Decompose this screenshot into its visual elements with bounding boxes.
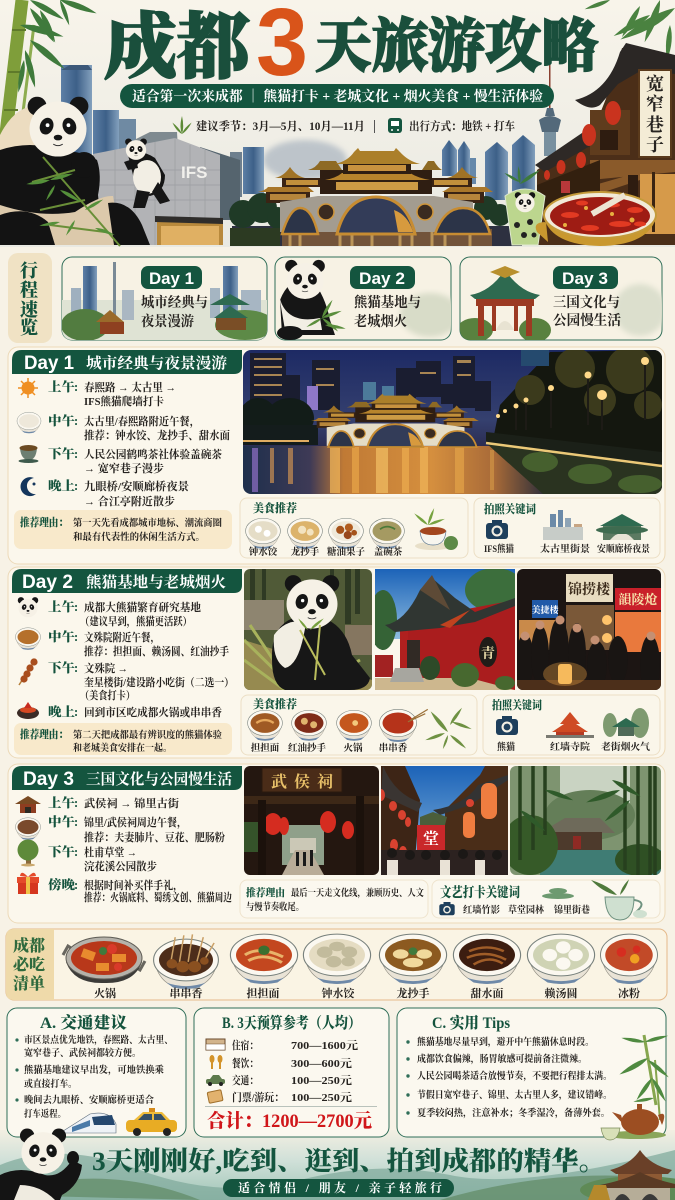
- dish: 担担面: [230, 934, 298, 984]
- Day 3 schedule: 上午: [48, 795, 76, 810]
- icon: taxi: [126, 1108, 177, 1136]
- must-eat tag: 清单: [13, 974, 45, 993]
- Day 2 photo: panda with bamboo: [244, 569, 372, 690]
- Day 2 photo keywords box: 老街烟火气: [601, 741, 650, 753]
- Day 2 reason box: [14, 723, 232, 755]
- dish labels: 担担面: [246, 986, 280, 1000]
- dish: 赖汤圆: [527, 934, 595, 984]
- Day 1 schedule: 推荐：钟水饺、龙抄手、甜水面: [84, 428, 230, 442]
- Day 1 schedule: 下午: [48, 446, 76, 461]
- icon: hotpot: [17, 702, 39, 719]
- overview card day 3: Day 3: [562, 269, 608, 288]
- dish labels: 赖汤圆: [544, 986, 578, 1000]
- panel A: transport advice: 晚间去九眼桥、安顺廊桥更适合: [24, 1094, 154, 1106]
- IFS sign: IFS: [181, 163, 207, 182]
- icon: temple: [15, 796, 41, 813]
- panel C: practical tips: [397, 1008, 666, 1137]
- food: 担担面: [248, 710, 282, 741]
- Day 2 photo: night food street: 韻陵炝: [618, 592, 658, 607]
- Day 2 reason box: 和老城美食安排在一起。: [73, 742, 172, 754]
- Day 1 schedule: :: [74, 479, 78, 493]
- icon: camera: [486, 520, 508, 539]
- icon: bed: [206, 1039, 225, 1050]
- Day 1 food box: 盖碗茶: [374, 546, 403, 558]
- Day 2 photo: night food street: [516, 569, 661, 695]
- icon: rice bowl: [17, 412, 41, 433]
- panel B: budget: 100—250元: [291, 1074, 352, 1087]
- Day 3 header: [12, 766, 242, 790]
- dish labels: 冰粉: [618, 986, 640, 1000]
- Day 1 schedule: IFS熊猫爬墙打卡: [84, 394, 164, 408]
- Day 3 schedule: 杜甫草堂 →: [84, 845, 137, 859]
- panel B: budget: B. 3天预算参考（人均）: [222, 1013, 361, 1032]
- 宽窄巷子 sign: 窄: [646, 94, 664, 114]
- icon: skewer: [19, 658, 38, 685]
- temple bottom right: [580, 1150, 675, 1200]
- overview tag: 程: [20, 280, 38, 300]
- Day 1 schedule: → 合江亭附近散步: [84, 494, 175, 508]
- dish: 甜水面: [453, 934, 521, 984]
- old street sketch: [603, 708, 649, 738]
- panel B: budget: 餐饮：: [232, 1056, 258, 1070]
- panel: Day 2: [8, 567, 665, 758]
- overview card day 2: 熊猫基地与: [354, 294, 421, 311]
- Day 3 reason box: 与慢节奏收尾。: [246, 901, 304, 913]
- Day 1 schedule: :: [74, 380, 78, 394]
- Day 1 schedule: 中午: [48, 413, 76, 428]
- Day 2 photo: night food street: 锦捞楼: [568, 581, 611, 598]
- Day 3 schedule: :: [74, 878, 78, 892]
- panel: Day 1: [8, 346, 665, 564]
- bamboo top right: [584, 0, 675, 61]
- Day 1 food box: 糖油果子: [327, 546, 365, 558]
- Day 1 schedule: 晚上: [48, 478, 76, 493]
- overview card day 3: 公园慢生活: [553, 312, 621, 329]
- skyline: [250, 353, 491, 411]
- Day 3 schedule: 中午: [48, 814, 76, 829]
- season and transport info: 出行方式：地铁 + 打车: [409, 119, 515, 133]
- overview card day 2: 老城烟火: [354, 313, 407, 330]
- panel A: transport advice: 熊猫基地建议早出发，可地铁换乘: [24, 1064, 164, 1076]
- Day 3 art keywords box: 草堂园林: [508, 904, 544, 916]
- water: [243, 446, 662, 494]
- Day 3 art keywords box: [432, 878, 660, 920]
- Day 2 schedule: 晚上: [48, 704, 76, 719]
- panel A: transport advice: A. 交通建议: [40, 1013, 127, 1032]
- icon: ticket: [207, 1090, 223, 1103]
- Day 2 schedule: 推荐：担担面、赖汤圆、红油抄手: [84, 644, 229, 658]
- overview tag: 览: [20, 317, 38, 338]
- Day 1 header: Day 1: [24, 353, 74, 374]
- Anshun bridge with trees and water: [229, 148, 522, 246]
- food: 糖油果子: [329, 518, 363, 549]
- Day 2 photo keywords box: 红墙寺院: [550, 741, 591, 753]
- Day 2 schedule: 下午: [48, 660, 76, 675]
- Day 2 photo: red wall temple: 青: [481, 645, 495, 662]
- hotpot bowl: [536, 192, 656, 246]
- Day 2 photo: night food street: 美捷楼: [531, 604, 559, 615]
- Day 2 schedule: 文殊院 →: [84, 661, 128, 675]
- old street building and sign: [535, 43, 675, 245]
- dish: 火锅: [63, 937, 145, 983]
- panel A: transport advice: 宽窄巷子、武侯祠都较方便。: [24, 1047, 141, 1059]
- Day 1 food box: 龙抄手: [291, 546, 320, 558]
- Day 1 reason box: [14, 510, 232, 549]
- bank: [486, 443, 662, 494]
- IFS building with climbing panda: [93, 132, 240, 245]
- Day 3 schedule: 锦里/武侯祠周边午餐，: [84, 815, 187, 829]
- panel B: budget: 门票/游玩：: [232, 1090, 284, 1104]
- 宽窄巷子 sign: 子: [646, 135, 664, 155]
- Day 2 schedule: 中午: [48, 629, 76, 644]
- Day 1 schedule: 太古里/春熙路附近午餐，: [84, 414, 200, 428]
- Day 1 header: 城市经典与夜景漫游: [86, 354, 227, 372]
- Day 2 food box: 红油抄手: [288, 742, 326, 754]
- Day 3 header: Day 3: [23, 769, 74, 790]
- Day 1 photo keywords box: 拍照关键词: [484, 502, 536, 516]
- overview card day 1: Day 1: [149, 269, 194, 288]
- footer slogan: 3天刚刚好,吃到、逛到、拍到成都的精华。: [92, 1146, 606, 1176]
- dish labels: 串串香: [170, 986, 202, 1000]
- Day 3 schedule: :: [74, 845, 78, 859]
- left trees: [243, 398, 314, 425]
- Day 3 schedule: 推荐：火锅底料、蜀绣文创、熊猫周边: [84, 890, 232, 904]
- Day 2 reason box: 推荐理由：: [20, 727, 68, 741]
- Day 1 schedule: 九眼桥/安顺廊桥夜景: [84, 479, 190, 493]
- subtitle pill: 适合第一次来成都 ｜ 熊猫打卡 + 老城文化 + 烟火美食 + 慢生活体验: [132, 88, 543, 105]
- footer audience pill: [223, 1179, 454, 1197]
- panel C: practical tips: C. 实用 Tips: [432, 1013, 510, 1032]
- Day 2 schedule: [15, 597, 234, 719]
- Day 1 photo keywords box: [474, 498, 660, 558]
- food: 龙抄手: [288, 518, 322, 549]
- icon: camera: [439, 902, 455, 915]
- Day 3 photo: Jinli street: 堂: [423, 829, 439, 848]
- Day 3 art keywords box: 红墙竹影: [463, 904, 500, 916]
- dish labels: 火锅: [94, 986, 116, 1000]
- Day 1 night photo: Anshun bridge: [238, 346, 662, 494]
- giant panda eating bamboo: [0, 97, 150, 246]
- panel B: budget: 300—600元: [291, 1057, 352, 1070]
- Day 1 header: [12, 350, 242, 374]
- Day 1 food box: 美食推荐: [253, 501, 297, 515]
- Day 2 food box: 串串香: [379, 742, 408, 754]
- bamboo left: [4, 0, 98, 150]
- footer audience pill: 适合情侣 / 朋友 / 亲子轻旅行: [238, 1180, 442, 1195]
- Day 3 schedule: :: [74, 815, 78, 829]
- header banner: city illustration and title: [0, 0, 675, 247]
- dish: 钟水饺: [303, 934, 371, 984]
- budget total: 合计：1200—2700元: [207, 1109, 372, 1132]
- panel C: practical tips: 成都饮食偏辣，肠胃敏感可提前备注微辣。: [417, 1053, 587, 1065]
- panel: footer landscape: [0, 1130, 675, 1200]
- panel B: budget: 700—1600元: [291, 1039, 358, 1052]
- overview tag: 速: [20, 299, 40, 320]
- overview card day 1: [61, 257, 275, 341]
- Day 2 header: 熊猫基地与老城烟火: [86, 573, 226, 591]
- must-eat tag: 成都: [13, 936, 45, 955]
- Day 3 reason box: 推荐理由: [246, 886, 285, 899]
- title: [104, 0, 598, 96]
- Day 3 schedule: 武侯祠 → 锦里古街: [84, 796, 179, 810]
- icon: teacup with leaves: [413, 508, 458, 550]
- icon: panda: [18, 597, 38, 617]
- Day 1 reason box: 推荐理由：: [20, 515, 68, 529]
- Day 3 photo: Wuhou shrine gate: [244, 766, 379, 875]
- Day 3 reason box: 最后一天走文化线，兼顾历史、人文: [291, 887, 424, 899]
- panel B: budget: [194, 1008, 389, 1137]
- title: 天旅游攻略: [315, 0, 598, 83]
- Day 1 schedule: 春熙路 → 太古里 →: [84, 380, 176, 394]
- panel: must-eat list: [6, 929, 667, 1000]
- season and transport info: [171, 116, 515, 135]
- icon: moon: [21, 477, 36, 496]
- pine sketch: [542, 888, 574, 899]
- must-eat tag: [6, 929, 54, 1000]
- overview tag: 行: [20, 261, 38, 281]
- icon: sun: [18, 378, 38, 398]
- Day 2 schedule: :: [74, 600, 78, 614]
- Day 2 schedule: （建议早到，熊猫更活跃）: [80, 614, 192, 628]
- climbing panda: [124, 138, 170, 208]
- Day 2 food box: 火锅: [343, 742, 363, 754]
- waving panda: [0, 1129, 82, 1200]
- subtitle pill: [120, 84, 554, 108]
- Day 2 header: Day 2: [22, 572, 73, 593]
- right trees with lamps: [494, 350, 662, 452]
- Day 3 schedule: 傍晚: [48, 877, 76, 892]
- overview card day 3: [457, 257, 666, 342]
- overview tag: [8, 253, 52, 343]
- overview card day 1: 夜景漫游: [141, 313, 194, 330]
- icon: tree: [18, 840, 38, 866]
- Day 2 reason box: 第二天把成都最有辨识度的熊猫体验: [73, 729, 222, 741]
- Day 1 schedule: 人民公园鹤鸣茶社体验盖碗茶: [84, 447, 222, 461]
- dish: 串串香: [154, 934, 218, 989]
- Day 2 food box: 美食推荐: [253, 697, 297, 711]
- overview card day 2: Day 2: [359, 269, 405, 288]
- Day 2 schedule: 回到市区吃成都火锅或串串香: [84, 705, 222, 719]
- Day 2 schedule: 成都大熊猫繁育研究基地: [84, 600, 201, 614]
- Day 3 photo: bamboo garden: [502, 766, 665, 876]
- Day 1 food box: 钟水饺: [249, 546, 278, 558]
- icon: noodle bowl: [15, 628, 41, 650]
- 宽窄巷子 sign: [639, 70, 671, 157]
- icon: bowl: [15, 818, 41, 840]
- panel B: budget: 住宿：: [232, 1038, 258, 1052]
- Day 3 schedule: 根据时间补买伴手礼，: [84, 878, 183, 892]
- panel B: budget: 交通：: [232, 1073, 258, 1087]
- bamboo and teapot decoration: [601, 1034, 670, 1140]
- food: 钟水饺: [246, 518, 280, 549]
- Day 2 schedule: :: [74, 630, 78, 644]
- overview card day 3: 三国文化与: [553, 294, 620, 311]
- Day 2 schedule: 奎星楼街/建设路小吃街（二选一）: [84, 675, 234, 689]
- panda milk tea: [504, 166, 545, 245]
- skyline sketch: [543, 510, 583, 540]
- dish: 龙抄手: [379, 934, 447, 984]
- leaves: [425, 707, 472, 750]
- panel C: practical tips: 节假日宽窄巷子、锦里、太古里人多，建议错峰。: [417, 1089, 612, 1101]
- Day 3 schedule: 下午: [48, 844, 76, 859]
- Day 3 schedule: [15, 795, 232, 904]
- Day 1 reason box: 第一天先看成都城市地标、潮流商圈: [73, 517, 222, 529]
- Day 2 schedule: 上午: [48, 599, 76, 614]
- food: 串串香: [379, 709, 428, 742]
- Day 3 reason box: [240, 880, 428, 918]
- Day 1 photo keywords box: 安顺廊桥夜景: [597, 543, 650, 555]
- Day 1 reason box: 和最有代表性的休闲生活方式。: [73, 531, 205, 543]
- Day 2 food box: [241, 695, 477, 755]
- panel C: practical tips: 熊猫基地尽量早到，避开中午熊猫休息时段。: [417, 1036, 594, 1048]
- icon: gift: [17, 873, 39, 894]
- Day 2 header: [12, 569, 242, 593]
- Day 1 schedule: :: [74, 414, 78, 428]
- food: 盖碗茶: [370, 518, 404, 549]
- dish labels: 钟水饺: [322, 986, 355, 1000]
- panel C: practical tips: 人民公园喝茶适合放慢节奏，不要把行程排太满。: [417, 1070, 612, 1082]
- panel: Day 3: [8, 764, 665, 923]
- Day 2 photo keywords box: 熊猫: [497, 741, 515, 753]
- Day 1 photo keywords box: IFS熊猫: [484, 543, 514, 555]
- 宽窄巷子 sign: 宽: [646, 73, 664, 94]
- Day 3 art keywords box: 锦里街巷: [554, 904, 590, 916]
- icon: camera: [496, 716, 518, 735]
- dish labels: 甜水面: [470, 986, 504, 1000]
- gate sketch: [596, 514, 648, 540]
- must-eat tag: 必吃: [13, 955, 45, 974]
- Day 2 photo: red wall temple: [375, 569, 515, 690]
- Day 2 schedule: 文殊院附近午餐，: [84, 630, 160, 644]
- season and transport info: 建议季节：3月—5月、10月—11月: [196, 119, 365, 133]
- 宽窄巷子 sign: 巷: [646, 115, 664, 135]
- Day 3 header: 三国文化与公园慢生活: [86, 770, 232, 788]
- icon: tea cup: [590, 878, 647, 920]
- panel C: practical tips: 夏季较闷热，注意补水；冬季湿冷，备薄外套。: [417, 1107, 610, 1119]
- Day 3 schedule: 推荐：夫妻肺片、豆花、肥肠粉: [84, 830, 225, 844]
- Day 1 schedule: → 宽窄巷子漫步: [84, 461, 164, 475]
- food: 火锅: [337, 710, 371, 741]
- dish: 冰粉: [600, 934, 658, 984]
- panel A: transport advice: 市区景点优先地铁，春熙路、太古里、: [24, 1034, 173, 1046]
- panel A: transport advice: 打车返程。: [24, 1108, 66, 1120]
- Day 2 schedule: （美食打卡）: [80, 688, 135, 702]
- Day 3 art keywords box: 文艺打卡关键词: [440, 884, 520, 900]
- Day 2 photo keywords box: 拍照关键词: [492, 698, 542, 712]
- overview card day 1: 城市经典与: [141, 294, 208, 311]
- icon: utensils: [210, 1055, 222, 1069]
- background skyline: [61, 62, 561, 200]
- Day 3 schedule: :: [74, 796, 78, 810]
- panel B: budget: 100—250元: [291, 1091, 352, 1104]
- Day 1 schedule: 上午: [48, 379, 76, 394]
- Day 3 schedule: 浣花溪公园散步: [84, 859, 157, 873]
- panel A: transport advice: [7, 1008, 186, 1137]
- icon: tea cup: [18, 445, 38, 463]
- Day 2 food box: 担担面: [251, 742, 280, 754]
- Day 1 schedule: [17, 378, 230, 508]
- Day 1 schedule: :: [74, 447, 78, 461]
- Day 3 photo: Jinli street: [377, 766, 508, 875]
- Day 3 photo: Wuhou shrine gate: 武侯祠: [271, 772, 333, 791]
- Day 2 schedule: :: [74, 661, 78, 675]
- panel: itinerary overview: [8, 253, 666, 343]
- panel A: transport advice: 或直接打车。: [24, 1078, 77, 1090]
- overview card day 2: [275, 257, 460, 340]
- Day 1 photo keywords box: 太古里街景: [540, 543, 591, 555]
- dish labels: [94, 986, 640, 1000]
- food: 红油抄手: [292, 710, 326, 741]
- Day 2 schedule: :: [74, 705, 78, 719]
- icon: car: [206, 1075, 225, 1086]
- red temple sketch: [546, 712, 594, 738]
- dish labels: 龙抄手: [396, 986, 430, 1000]
- Day 1 food box: [240, 498, 468, 558]
- Day 2 photo keywords box: [483, 695, 660, 755]
- icon: train: [60, 1113, 116, 1133]
